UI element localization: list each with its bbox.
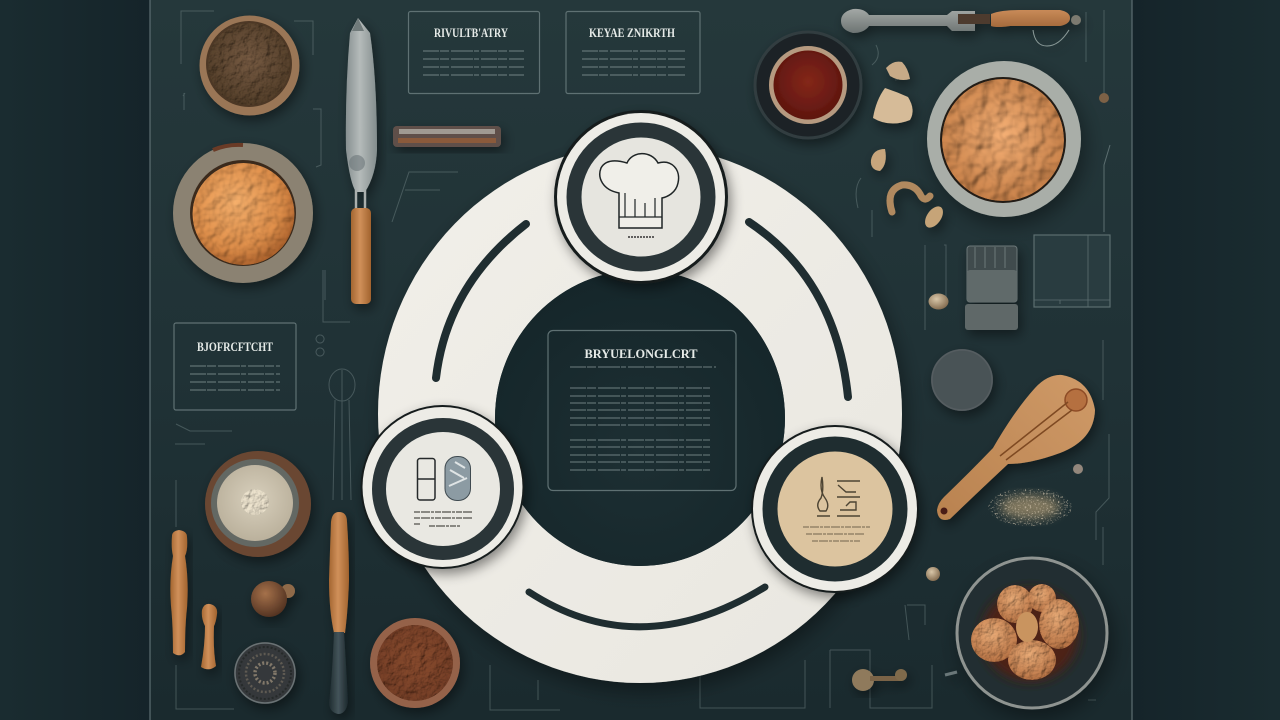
icon: nut pieces [871, 62, 947, 231]
icon: baked bun in stone bowl [173, 143, 313, 283]
icon: small pebbles [926, 93, 1109, 581]
icon: wooden pestle short [201, 604, 217, 669]
slot: upper right [749, 222, 848, 397]
icon: metal spatula with wooden handle [841, 9, 1081, 46]
icon: spilled flour [988, 488, 1072, 526]
text lines: left note [190, 366, 280, 390]
text lines: central note [570, 367, 716, 470]
icon: stone bowl of nuts [927, 61, 1081, 217]
heading: left note: BJOFRCFTCHT [197, 339, 273, 354]
icon: brown spice bowl [200, 16, 300, 116]
icon: wooden spoon [937, 375, 1095, 520]
panel: left note [174, 323, 296, 410]
text lines: top right note [582, 51, 685, 75]
icon: sauce bowl [755, 32, 861, 138]
panel: top right note [566, 12, 700, 94]
heading: top left note: RIVULTB'ATRY [434, 25, 508, 40]
icon: flour jar [205, 451, 311, 557]
badge: sand coloured tool card [751, 425, 919, 593]
badge: storage [360, 405, 524, 569]
ring hole shading [495, 270, 785, 566]
icon: rolling pin handle with dark end [329, 512, 349, 714]
ring diagram [360, 110, 919, 683]
badge: chef hat [554, 110, 728, 284]
icon: cocoa bowl [370, 618, 460, 708]
icon: container and capsule [418, 456, 470, 500]
icon: small metal clip [393, 126, 501, 147]
icon: dish of baked pieces [957, 558, 1107, 708]
slot: upper left [436, 224, 526, 378]
icon: small brass key [852, 669, 957, 691]
text lines: tool card [803, 527, 870, 541]
text lines: top left note [423, 51, 524, 75]
decorative linework [175, 10, 1109, 710]
icon: chef hat [600, 154, 679, 237]
heading: central note: BRYUELONGLCRT [584, 346, 698, 361]
white ring plate [378, 145, 902, 683]
icon: whisk outline [329, 369, 355, 500]
text lines: storage badge [414, 512, 472, 526]
icon: wooden pestle left [170, 530, 188, 655]
icon: palette knife [346, 18, 377, 304]
icon: dark grater disc [234, 642, 296, 704]
heading: top right note: KEYAE ZNIKRTH [589, 25, 675, 40]
panel: top left note [408, 12, 540, 94]
icon: slate disc [931, 349, 993, 411]
icon: glass pastry block [965, 246, 1018, 330]
icon: wooden ball [251, 581, 295, 617]
slot: bottom [529, 587, 765, 627]
icon: outlined square [1034, 145, 1110, 307]
icon: tool glyphs [817, 477, 860, 516]
panel: central note [548, 330, 736, 490]
